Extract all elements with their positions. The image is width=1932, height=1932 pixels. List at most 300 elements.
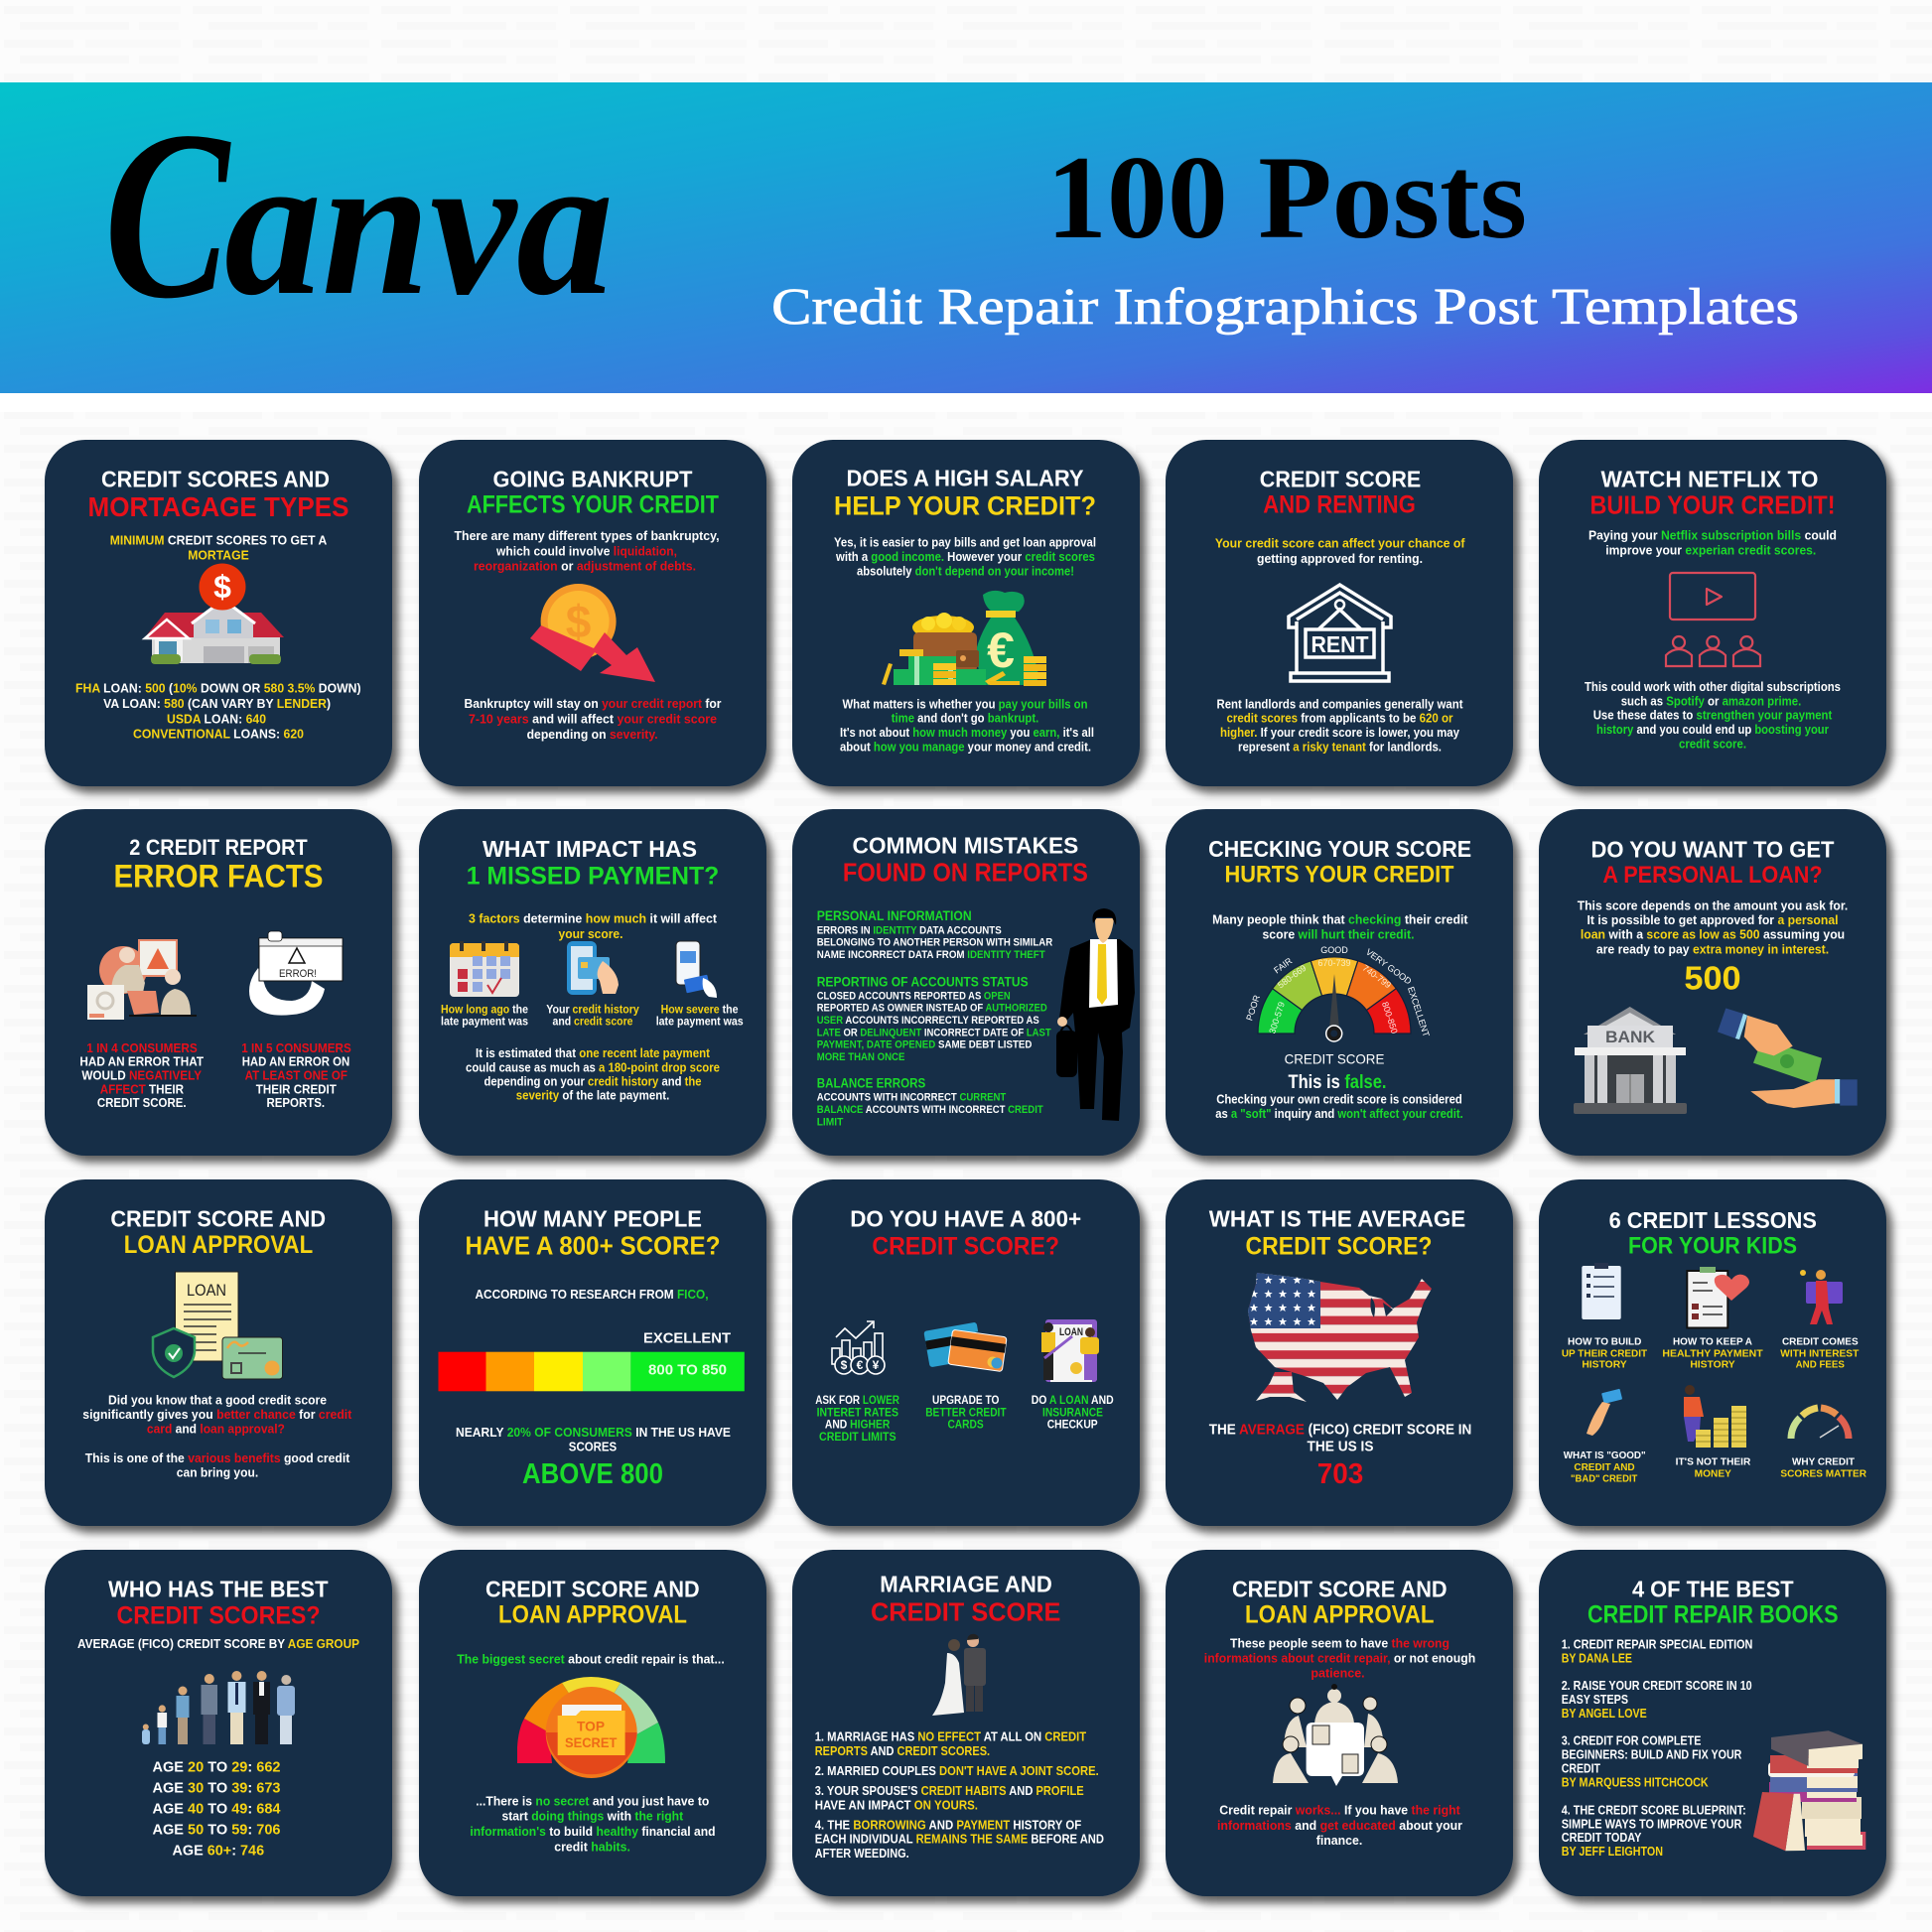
heading	[871, 1572, 1060, 1627]
panel: average credit score	[1166, 1179, 1513, 1526]
text block: wrong informations: patience.	[1311, 1666, 1365, 1681]
chart: credit score gauge: 580-669	[1276, 963, 1309, 990]
heading	[465, 1206, 721, 1260]
heading	[467, 836, 719, 891]
panel: how many people have 800+	[419, 1179, 766, 1526]
text block: checkup: DO A LOAN AND	[1032, 1393, 1114, 1407]
text block: scores by age: AGE 60+: 746	[173, 1842, 264, 1859]
icon: person with coin stacks	[1684, 1385, 1746, 1448]
text block: how long it stays: depending on severity.	[527, 727, 658, 742]
text block: factor captions: How long ago the	[441, 1002, 528, 1016]
heading: DO YOU HAVE A 800+	[850, 1206, 1081, 1232]
icon: top secret gauge	[517, 1677, 665, 1778]
text block: reporting of accounts status: REPORTED AS OWNER INSTEAD OF AUTHORIZED	[817, 1003, 1047, 1015]
text block: marriage facts: 4. THE BORROWING AND PAYMENT HISTORY OF	[815, 1818, 1082, 1832]
text block: reporting of accounts status: PAYMENT, DATE OPENED SAME DEBT LISTED	[817, 1039, 1032, 1051]
text block: marriage facts: 2. MARRIED COUPLES DON'T HAVE A JOINT SCORE.	[815, 1764, 1099, 1778]
chart: credit score gauge	[1244, 945, 1432, 1067]
text block: types of bankruptcy	[455, 528, 719, 573]
heading: 1 MISSED PAYMENT?	[467, 863, 719, 891]
text block: 1 in 4: WOULD NEGATIVELY	[81, 1067, 202, 1082]
heading: CREDIT SCORES AND	[101, 467, 330, 492]
text block: netflix bills	[1588, 528, 1837, 558]
text block: 1 in 4: 1 IN 4 CONSUMERS	[86, 1040, 198, 1055]
text block: 1 in 4: HAD AN ERROR THAT	[79, 1054, 204, 1069]
text block: renting intro	[1215, 536, 1465, 566]
text block: lessons row one: HISTORY	[1582, 1359, 1627, 1371]
heading: WHO HAS THE BEST	[108, 1576, 329, 1601]
text block: book list: BY ANGEL LOVE	[1562, 1707, 1647, 1721]
icon: house with dollar badge: $	[213, 569, 231, 605]
text block: what matters	[840, 697, 1094, 754]
text block: netflix bills: improve your experian credit scores.	[1605, 543, 1816, 558]
text block: subtitle: AVERAGE (FICO) CREDIT SCORE BY AGE GROUP	[77, 1636, 359, 1651]
chart: score colour bar: EXCELLENT	[643, 1330, 731, 1347]
text block: balance errors: ACCOUNTS WITH INCORRECT CURRENT	[817, 1092, 1007, 1104]
text block: myth	[1212, 911, 1468, 942]
heading	[467, 467, 719, 519]
text block: 1 in 5	[241, 1040, 351, 1110]
chart: credit score gauge: CREDIT SCORE	[1285, 1051, 1384, 1067]
text block: lessons row one: HOW TO BUILD	[1568, 1335, 1642, 1347]
score number: 500	[1684, 959, 1741, 996]
heading: AFFECTS YOUR CREDIT	[467, 491, 719, 519]
icon: screen and audience	[1666, 573, 1760, 666]
text block: 1 in 4: AFFECT THEIR	[100, 1081, 185, 1096]
illustration: error window: ERROR!	[279, 968, 317, 980]
panel: 6 credit lessons	[1539, 1179, 1886, 1526]
icon: bank: BANK	[1605, 1028, 1656, 1046]
heading: CREDIT SCORE?	[1245, 1232, 1432, 1260]
text block: good credit: This is one of the various benefits good credit	[85, 1450, 350, 1465]
text block: lessons row one: HISTORY	[1690, 1359, 1735, 1371]
text block: scores by age: AGE 40 TO 49: 684	[153, 1800, 281, 1817]
heading: WHAT IS THE AVERAGE	[1209, 1206, 1465, 1232]
text block: this is false	[1215, 1072, 1463, 1121]
icon: top secret gauge: TOP	[577, 1718, 605, 1733]
text block: 1 in 5: REPORTS.	[266, 1095, 325, 1110]
panel: checking your score	[1166, 809, 1513, 1156]
icon: house with dollar badge	[145, 564, 284, 664]
text block: lessons row two: SCORES MATTER	[1780, 1467, 1866, 1479]
text block: good credit: card and loan approval?	[147, 1422, 285, 1437]
text block: lessons row two: WHAT IS "GOOD"	[1564, 1449, 1646, 1461]
text block: lower rates	[815, 1393, 899, 1444]
illustration: people facing error screens	[87, 940, 197, 1020]
text block: lessons row one: CREDIT COMES	[1782, 1335, 1859, 1347]
text block: 3 factors: 3 factors determine how much it will affect	[469, 910, 718, 925]
heading: DO YOU WANT TO GET	[1590, 836, 1835, 862]
panel: best credit scores by age	[45, 1550, 392, 1896]
text block: 1 in 5: AT LEAST ONE OF	[245, 1067, 347, 1082]
heading: HURTS YOUR CREDIT	[1225, 861, 1454, 888]
text block: netflix bills: Paying your Netflix subscription bills could	[1588, 528, 1837, 543]
panel: biggest secret	[419, 1550, 766, 1896]
icon: money bag, wallet and coins	[882, 591, 1046, 686]
icon: rising chart and currency coins: $	[841, 1358, 848, 1372]
text block: 1 in 5: THEIR CREDIT	[256, 1081, 337, 1096]
icon: loan document with shield and card: LOAN	[187, 1281, 226, 1300]
text block: other subscriptions: This could work with other digital subscriptions	[1585, 680, 1841, 694]
text block: other subscriptions	[1585, 680, 1841, 751]
icon: rising chart and currency coins: ¥	[873, 1358, 880, 1372]
icon: top secret gauge: SECRET	[565, 1734, 618, 1750]
illustration: people by age	[142, 1671, 295, 1744]
text block: other subscriptions: credit score.	[1679, 737, 1746, 751]
text block: landlords: represent a risky tenant for landlords.	[1238, 740, 1442, 754]
text block: income: absolutely don't depend on your income!	[857, 564, 1074, 578]
text block: checkup: CHECKUP	[1047, 1418, 1098, 1432]
heading: WATCH NETFLIX TO	[1600, 466, 1819, 491]
text block: checkup: INSURANCE	[1042, 1405, 1103, 1419]
text block: reporting of accounts status: REPORTING OF ACCOUNTS STATUS	[817, 974, 1029, 989]
text block: upgrade: BETTER CREDIT	[925, 1405, 1007, 1419]
text block: credit repair works: Credit repair works... If you have the right	[1219, 1803, 1460, 1818]
heading	[850, 1206, 1081, 1260]
chart: credit score gauge: VERY GOOD	[1364, 947, 1414, 987]
text block: book list: 4. THE CREDIT SCORE BLUEPRINT:	[1562, 1803, 1746, 1817]
text block: marriage facts: 3. YOUR SPOUSE'S CREDIT HABITS AND PROFILE	[815, 1784, 1084, 1798]
panel: common mistakes	[792, 809, 1140, 1156]
heading: CREDIT SCORE AND	[110, 1206, 326, 1232]
text block: loan minimums: USDA LOAN: 640	[167, 711, 266, 726]
chart: credit score gauge: 800-850	[1380, 1001, 1400, 1035]
text block: what matters: about how you manage your money and credit.	[840, 740, 1091, 754]
text block: balance errors	[817, 1076, 1043, 1128]
text block: estimated drop	[466, 1046, 720, 1103]
panel: error facts	[45, 809, 392, 1156]
heading	[834, 465, 1096, 520]
heading	[110, 1206, 326, 1259]
text block: factor captions: and credit score	[552, 1015, 633, 1029]
text block: 1 in 5: HAD AN ERROR ON	[242, 1054, 349, 1069]
icon: bank	[1574, 1007, 1687, 1114]
text block: scores by age: AGE 20 TO 29: 662	[153, 1758, 280, 1775]
panel: going bankrupt	[419, 440, 766, 786]
chart: score colour bar: 800 TO 850	[648, 1361, 727, 1378]
text block: reporting of accounts status: LATE OR DELINQUENT INCORRECT DATE OF LAST	[817, 1027, 1051, 1038]
text block: factor captions: How severe the	[661, 1002, 739, 1016]
text block: lessons row one: AND FEES	[1796, 1359, 1845, 1371]
text block: average score: THE US IS	[1308, 1440, 1374, 1455]
text block: loan explanation: It is possible to get approved for a personal	[1587, 912, 1839, 927]
text block: good credit: Did you know that a good credit score	[108, 1392, 327, 1407]
heading: LOAN APPROVAL	[124, 1231, 313, 1259]
heading: CREDIT SCORE AND	[1232, 1576, 1448, 1601]
text block: no secret: information's to build healthy financial and	[470, 1824, 716, 1839]
text block: marriage facts: AFTER WEEDING.	[815, 1847, 909, 1861]
icon: phone with credit card in hand	[676, 941, 717, 998]
heading	[113, 835, 324, 895]
icon: falling coin arrow	[530, 584, 655, 682]
illustration: people around a table	[1273, 1684, 1398, 1786]
heading	[485, 1576, 700, 1628]
text block: book list: CREDIT	[1562, 1762, 1600, 1776]
icon: falling coin arrow: $	[566, 596, 591, 647]
text block: marriage facts: EACH INDIVIDUAL REMAINS THE SAME BEFORE AND	[815, 1833, 1104, 1847]
text block: 1 in 4: CREDIT SCORE.	[97, 1095, 187, 1110]
icon: rent house	[1289, 585, 1391, 681]
text block: no secret: start doing things with the right	[501, 1809, 684, 1824]
text block: 3 factors: your score.	[558, 926, 623, 941]
text block: book list	[1562, 1637, 1752, 1859]
panel: personal loan	[1539, 809, 1886, 1156]
text block: marriage facts: REPORTS AND CREDIT SCORES.	[815, 1744, 990, 1758]
panel: credit score and renting	[1166, 440, 1513, 786]
text block: this is false: as a "soft" inquiry and won't affect your credit.	[1215, 1107, 1463, 1121]
text block: upgrade	[925, 1393, 1007, 1432]
heading: LOAN APPROVAL	[1245, 1600, 1435, 1628]
chart: credit score gauge: FAIR	[1272, 955, 1295, 976]
text block: this is false: Checking your own credit score is considered	[1216, 1093, 1462, 1107]
heading: DOES A HIGH SALARY	[846, 465, 1084, 490]
text block: credit repair works: finance.	[1316, 1833, 1362, 1848]
illustration: wedding couple	[932, 1634, 986, 1716]
text block: balance errors: LIMIT	[817, 1116, 844, 1128]
text block: income: with a good income. However your credit scores	[835, 550, 1095, 564]
heading: AND RENTING	[1263, 491, 1416, 519]
text block: book list: BY DANA LEE	[1562, 1651, 1632, 1665]
chart: credit score gauge: 740-799	[1360, 963, 1393, 990]
text block: credit repair works: informations and get educated about your	[1217, 1818, 1462, 1833]
banner	[0, 80, 1932, 393]
text block: myth: Many people think that checking their credit	[1212, 911, 1468, 926]
text block: good credit: significantly gives you better chance for credit	[82, 1407, 352, 1422]
panel: credit scores and mortgage types	[45, 440, 392, 786]
heading	[108, 1576, 329, 1630]
illustration: businessman with bag	[1056, 908, 1135, 1121]
text block: nearly 20 percent	[456, 1425, 731, 1454]
text block: scores by age	[153, 1758, 281, 1859]
text block: book list: BY JEFF LEIGHTON	[1562, 1845, 1663, 1859]
text block: lessons row two: MONEY	[1695, 1467, 1731, 1479]
text block: nearly 20 percent: NEARLY 20% OF CONSUMERS IN THE US HAVE	[456, 1425, 731, 1440]
text block: intro	[110, 532, 328, 563]
icon: health report	[1687, 1267, 1749, 1328]
text block: scores by age: AGE 30 TO 39: 673	[153, 1779, 280, 1796]
logo: Canva script wordmark	[104, 80, 614, 348]
text block: average score	[1209, 1422, 1471, 1455]
text block: upgrade: CARDS	[947, 1418, 984, 1432]
text block: 1 in 5: 1 IN 5 CONSUMERS	[241, 1040, 351, 1055]
heading: BUILD YOUR CREDIT!	[1590, 492, 1835, 520]
text block: lessons row one: WITH INTEREST	[1780, 1347, 1860, 1359]
text block: scores by age: AGE 50 TO 59: 706	[153, 1821, 280, 1838]
text block: lessons row two: "BAD" CREDIT	[1571, 1473, 1638, 1485]
text block: factor captions	[441, 1002, 744, 1029]
text block: lessons row two	[1564, 1449, 1866, 1485]
heading	[1260, 466, 1421, 519]
icon: rising chart and currency coins: €	[857, 1358, 864, 1372]
text block: loan explanation: loan with a score as low as 500 assuming you	[1581, 927, 1845, 942]
text block: lower rates: CREDIT LIMITS	[819, 1430, 897, 1444]
heading: HELP YOUR CREDIT?	[834, 490, 1096, 520]
text block: how long it stays	[465, 696, 721, 742]
heading: CREDIT SCORES?	[117, 1602, 320, 1630]
heading: FOUND ON REPORTS	[843, 859, 1088, 887]
icon: money bag, wallet and coins: €	[987, 622, 1015, 678]
heading	[1609, 1207, 1817, 1259]
heading: COMMON MISTAKES	[852, 832, 1078, 858]
text block: landlords: Rent landlords and companies generally want	[1217, 697, 1463, 711]
panel: high salary	[792, 440, 1140, 786]
text block: lower rates: ASK FOR LOWER	[815, 1393, 899, 1407]
score callout: ABOVE 800	[522, 1458, 663, 1490]
text block: loan minimums: FHA LOAN: 500 (10% DOWN OR 580 3.5% DOWN)	[75, 681, 361, 696]
text block: personal information: PERSONAL INFORMATION	[817, 908, 972, 923]
text block: reporting of accounts status: CLOSED ACCOUNTS REPORTED AS OPEN	[817, 990, 1011, 1002]
text block: no secret	[470, 1793, 716, 1854]
icon: calendar	[450, 941, 519, 997]
text block: estimated drop: severity of the late payment.	[516, 1089, 669, 1103]
text block: 1 in 4	[79, 1040, 204, 1110]
text block: book list: 1. CREDIT REPAIR SPECIAL EDITION	[1562, 1637, 1752, 1651]
text block: lessons row two: CREDIT AND	[1574, 1461, 1635, 1473]
text block: no secret: credit habits.	[554, 1839, 630, 1854]
chart: credit score gauge: GOOD	[1320, 945, 1348, 955]
text block: personal information: NAME INCORRECT DATA FROM IDENTITY THEFT	[817, 949, 1045, 961]
panel: netflix	[1539, 440, 1886, 786]
icon: person holding credit card	[1800, 1270, 1843, 1324]
heading	[1208, 836, 1471, 888]
icon: checklist clipboard	[1582, 1263, 1621, 1319]
text block: lower rates: INTERET RATES	[817, 1405, 898, 1419]
heading: WHAT IMPACT HAS	[483, 836, 697, 862]
text block: balance errors: BALANCE ERRORS	[817, 1076, 925, 1091]
text block: nearly 20 percent: SCORES	[569, 1440, 617, 1454]
heading	[1590, 466, 1835, 520]
text block: other subscriptions: such as Spotify or amazon prime.	[1621, 694, 1801, 708]
text block: no secret: ...There is no secret and you just have to	[476, 1793, 709, 1808]
icon: credit cards	[923, 1322, 1007, 1372]
text block: book list: SIMPLE WAYS TO IMPROVE YOUR	[1562, 1817, 1741, 1831]
text block: reporting of accounts status: USER ACCOUNTS INCORRECTLY REPORTED AS	[817, 1015, 1039, 1027]
text block: income: Yes, it is easier to pay bills and get loan approval	[834, 536, 1096, 550]
text block: 3 factors	[469, 910, 718, 941]
panel: marriage and credit score	[792, 1550, 1140, 1896]
text block: what matters: It's not about how much money you earn, it's all	[840, 726, 1094, 740]
text block: renting intro: Your credit score can affect your chance of	[1215, 536, 1465, 551]
text block: lessons row one	[1562, 1335, 1860, 1371]
subtitle: Credit Repair Infographics Post Templates	[771, 279, 1799, 336]
heading: CHECKING YOUR SCORE	[1208, 836, 1471, 862]
panel: best credit repair books	[1539, 1550, 1886, 1896]
text block: factor captions: late payment was	[441, 1015, 528, 1029]
heading: 6 CREDIT LESSONS	[1609, 1207, 1817, 1233]
icon: hand holding card	[1587, 1389, 1622, 1436]
icon: loan paperwork with people: LOAN	[1059, 1326, 1083, 1338]
heading: HAVE A 800+ SCORE?	[465, 1232, 721, 1260]
text block: book list: CREDIT TODAY	[1562, 1831, 1642, 1845]
text block: renting intro: getting approved for renting.	[1257, 551, 1423, 566]
text block: factor captions: Your credit history	[546, 1002, 639, 1016]
text block: intro: MORTAGE	[188, 548, 249, 563]
text block: marriage facts	[815, 1730, 1104, 1861]
text block: loan explanation: This score depends on the amount you ask for.	[1578, 897, 1848, 913]
logo: Canva script wordmark: C	[104, 80, 231, 348]
text block: wrong informations: informations about credit repair, or not enough	[1204, 1651, 1475, 1666]
text block: upgrade: UPGRADE TO	[932, 1393, 999, 1407]
text block: other subscriptions: Use these dates to strengthen your payment	[1593, 709, 1833, 723]
text block: what matters: time and don't go bankrupt.	[892, 712, 1038, 726]
text block: research: ACCORDING TO RESEARCH FROM FICO,	[475, 1288, 709, 1302]
chart: credit score gauge: EXCELLENT	[1406, 986, 1432, 1038]
heading: LOAN APPROVAL	[498, 1600, 687, 1628]
text block: reporting of accounts status	[817, 974, 1051, 1063]
text block: loan explanation: are ready to pay extra money in interest.	[1596, 941, 1829, 957]
text block: book list: 2. RAISE YOUR CREDIT SCORE IN 10	[1562, 1679, 1752, 1693]
text block: estimated drop: depending on your credit history and the	[484, 1075, 702, 1089]
panel: missed payment	[419, 809, 766, 1156]
text block: checkup	[1032, 1393, 1114, 1432]
heading: HOW MANY PEOPLE	[483, 1206, 702, 1232]
panel: wrong information	[1166, 1550, 1513, 1896]
text block: balance errors: BALANCE ACCOUNTS WITH INCORRECT CREDIT	[817, 1104, 1043, 1116]
text block: loan minimums: CONVENTIONAL LOANS: 620	[133, 726, 304, 741]
text block: landlords: credit scores from applicants to be 620 or	[1227, 712, 1453, 726]
text block: personal information: BELONGING TO ANOTHER PERSON WITH SIMILAR	[817, 937, 1052, 949]
illustration: stack of books	[1753, 1730, 1865, 1851]
heading	[1587, 1576, 1839, 1628]
heading: ERROR FACTS	[113, 859, 324, 895]
text block: marriage facts: HAVE AN IMPACT ON YOURS.	[815, 1798, 978, 1812]
text block: how long it stays: Bankruptcy will stay on your credit report for	[465, 696, 721, 711]
heading: FOR YOUR KIDS	[1628, 1232, 1797, 1259]
chart: credit score gauge: 300-579	[1267, 1001, 1287, 1035]
text block: income	[834, 536, 1096, 578]
text block: secret: The biggest secret about credit repair is that...	[457, 1651, 725, 1666]
icon: loan paperwork with people	[1041, 1319, 1099, 1382]
text block: wrong informations	[1204, 1635, 1475, 1681]
text block: lessons row two: IT'S NOT THEIR	[1676, 1455, 1751, 1467]
heading	[1232, 1576, 1448, 1628]
text block: good credit	[82, 1392, 352, 1480]
icon: phone and card	[567, 941, 619, 995]
icon: rent house: RENT	[1311, 631, 1368, 657]
illustration: USA flag map	[1248, 1273, 1432, 1402]
text block: wrong informations: These people seem to have the wrong	[1230, 1635, 1449, 1650]
heading: 4 OF THE BEST	[1632, 1576, 1794, 1601]
text block: what matters: What matters is whether you pay your bills on	[842, 697, 1088, 711]
heading	[1209, 1206, 1465, 1260]
text block: estimated drop: could cause as much as a 180-point drop score	[466, 1060, 720, 1074]
text block: landlords	[1217, 697, 1463, 754]
illustration: error window	[249, 931, 343, 1016]
text block: book list: BEGINNERS: BUILD AND FIX YOUR	[1562, 1748, 1741, 1762]
text block: good credit: can bring you.	[177, 1465, 258, 1480]
heading	[1590, 836, 1835, 889]
heading: GOING BANKRUPT	[492, 467, 693, 492]
heading: A PERSONAL LOAN?	[1602, 862, 1823, 889]
text block: loan explanation	[1578, 897, 1848, 957]
heading: CREDIT SCORE	[1260, 466, 1421, 491]
text block: book list: EASY STEPS	[1562, 1693, 1628, 1707]
text block: lessons row one: UP THEIR CREDIT	[1562, 1347, 1648, 1359]
text block: loan minimums	[75, 681, 361, 741]
text block: lessons row one: HEALTHY PAYMENT	[1662, 1347, 1763, 1359]
text block: types of bankruptcy: There are many different types of bankruptcy,	[455, 528, 719, 543]
logo: Canva script wordmark: anva	[224, 112, 614, 338]
icon: score gauge	[1791, 1408, 1849, 1439]
text block: personal information	[817, 908, 1052, 961]
chart: credit score gauge: 670-739	[1317, 958, 1351, 968]
text block: this is false: This is false.	[1289, 1072, 1386, 1093]
text block: marriage facts: 1. MARRIAGE HAS NO EFFECT AT ALL ON CREDIT	[815, 1730, 1086, 1744]
panel: loan approval	[45, 1179, 392, 1526]
icon: hands exchanging cash	[1718, 1009, 1858, 1108]
panel: do you have a 800+	[792, 1179, 1140, 1526]
text block: book list: BY MARQUESS HITCHCOCK	[1562, 1775, 1709, 1789]
